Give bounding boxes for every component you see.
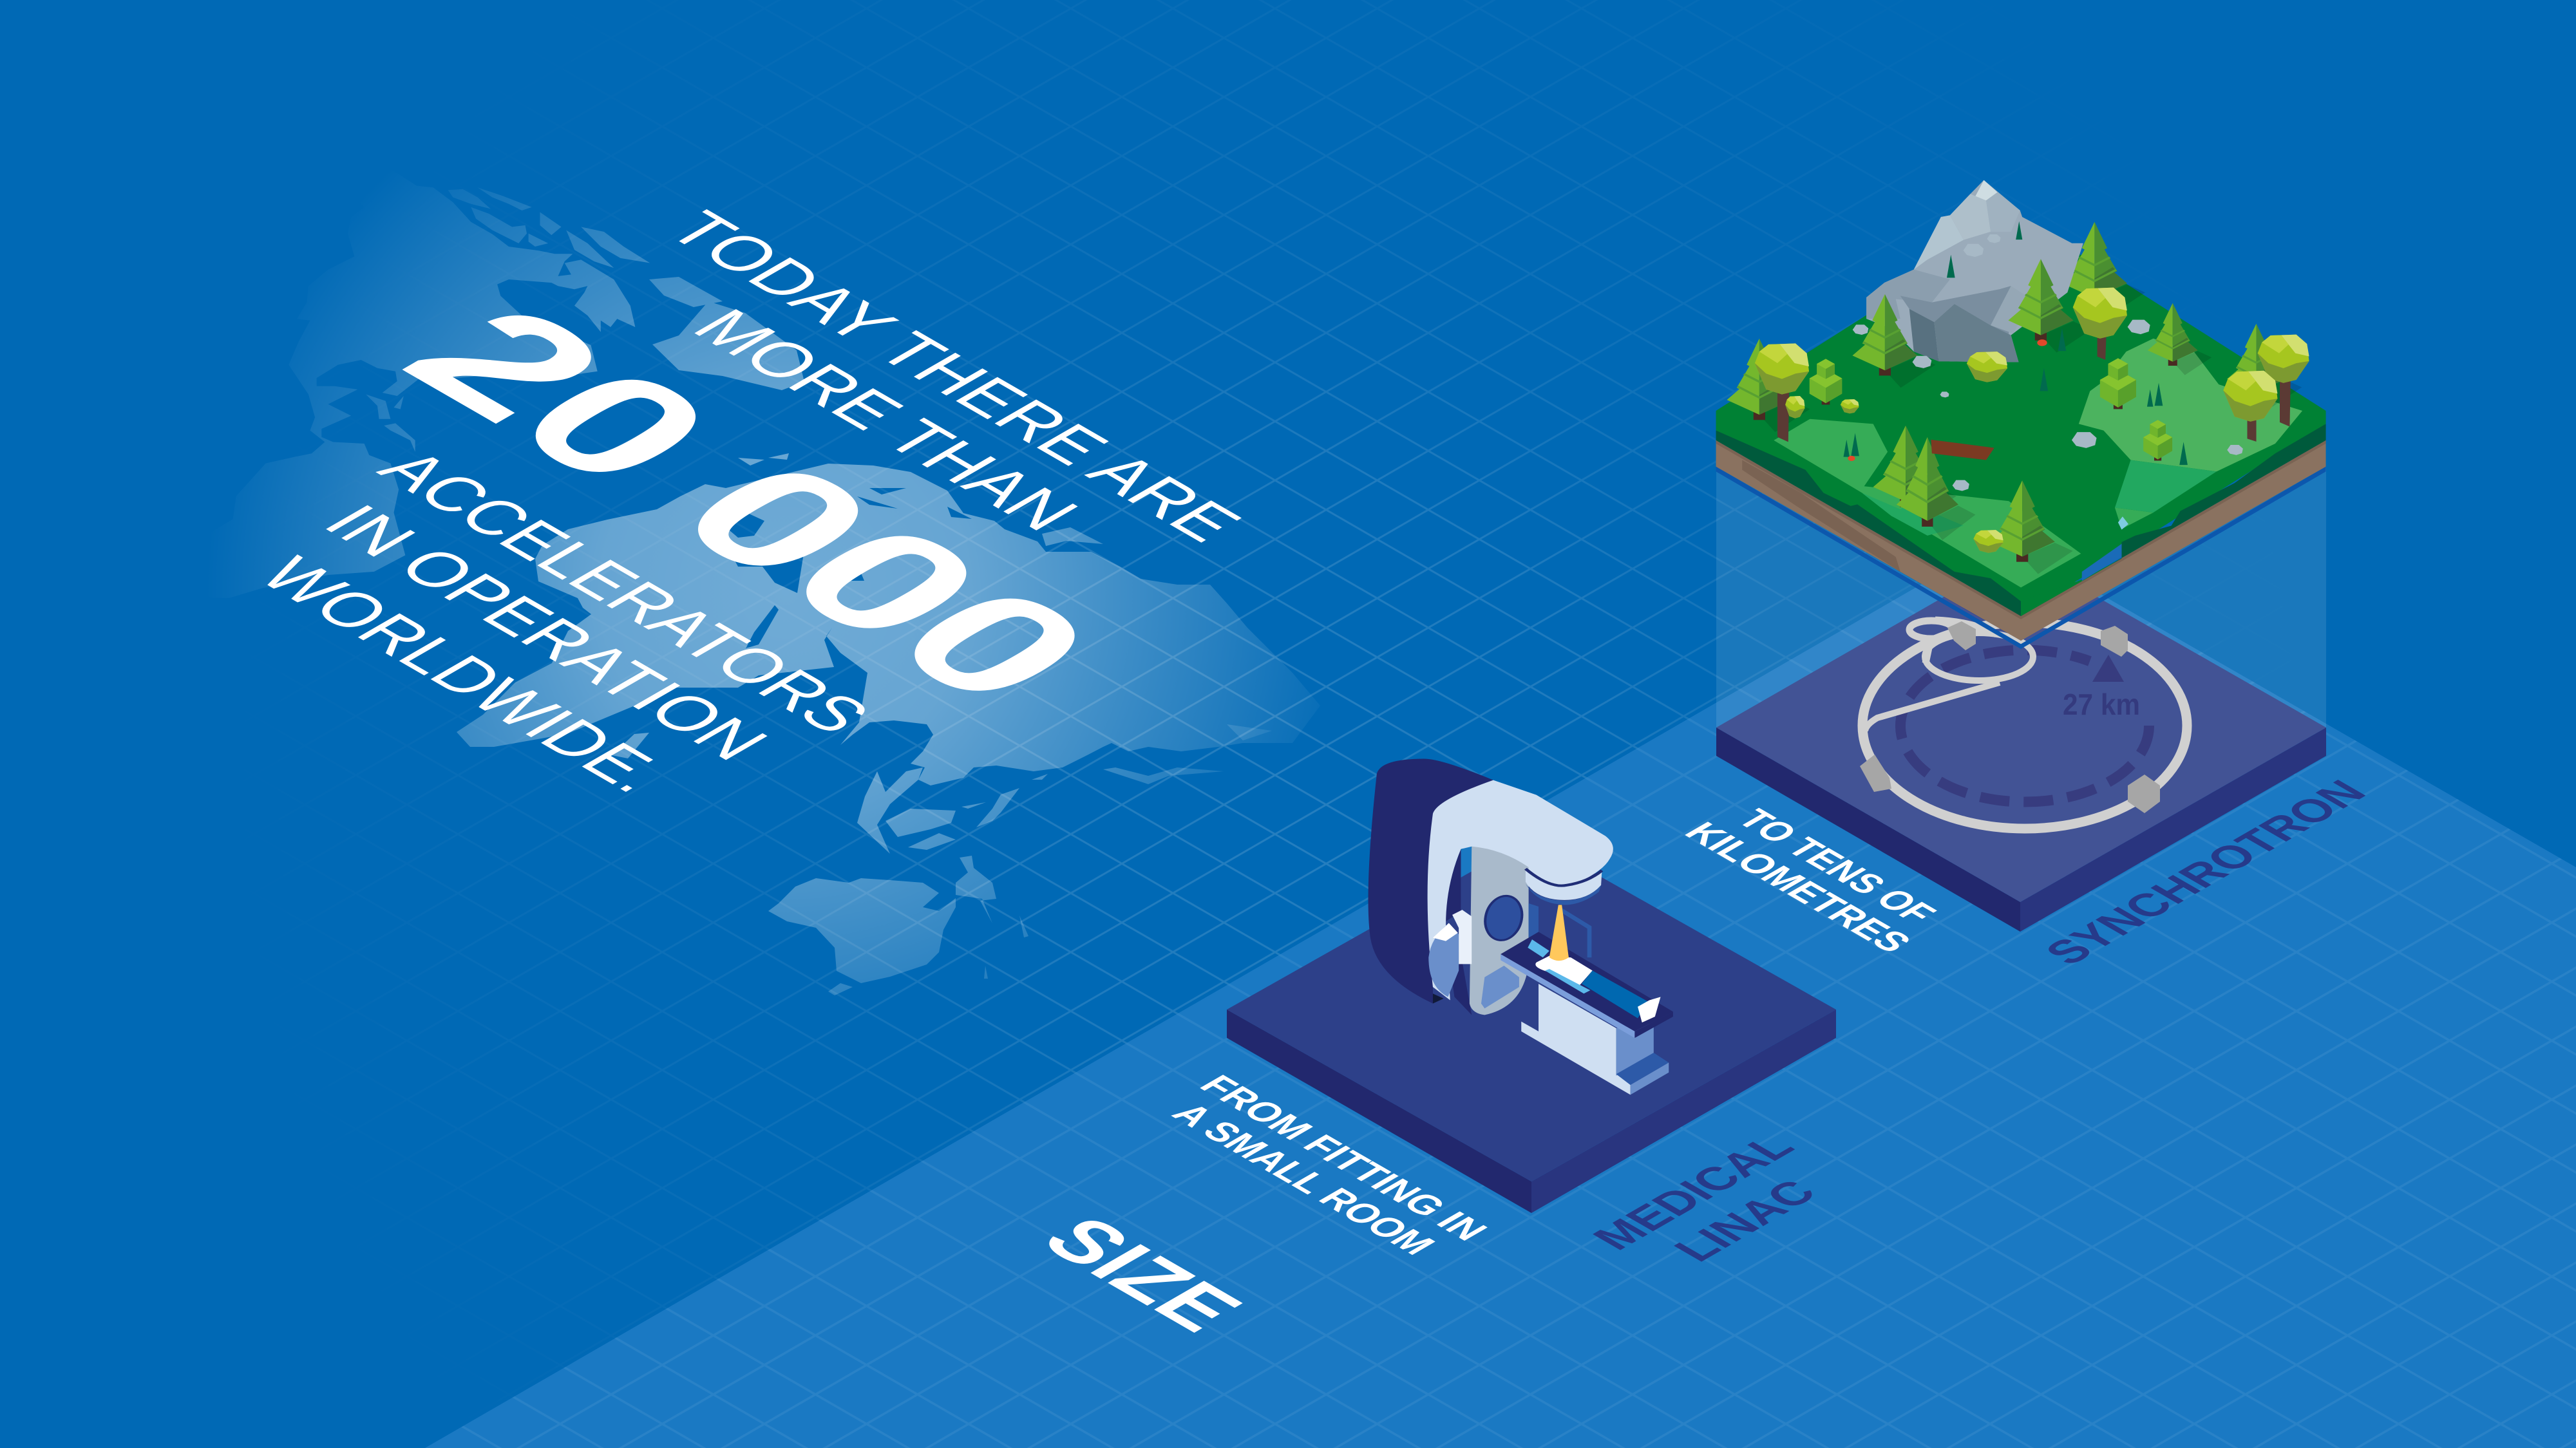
grid: upper plane (519, 3, 1918, 1280)
island soil (1716, 440, 2326, 641)
arm bracket (1452, 910, 1472, 964)
label: from fitting in a small room: A SMALL ROOM (1163, 1098, 1444, 1261)
text: more than: MORE THAN (677, 299, 1095, 541)
world map (200, 158, 1320, 995)
right grass front (2021, 559, 2121, 616)
teal patch, right (2115, 460, 2217, 512)
patient feet (1638, 997, 1661, 1022)
label: to tens of kilometres: TO TENS OF (1728, 804, 1946, 929)
dashed direction ring (1900, 650, 2149, 802)
base step top (1616, 1053, 1669, 1085)
small spikes (1844, 221, 2188, 465)
patient legs (1582, 971, 1649, 1019)
back pine (2062, 222, 2145, 315)
Americas mainland (200, 158, 635, 598)
bushes (1785, 352, 2007, 553)
cube trees (1810, 358, 2172, 461)
floor corner (1433, 993, 1444, 1004)
source loop (1909, 621, 1953, 639)
island shadow (1716, 467, 2326, 649)
patient arm (1545, 969, 1590, 993)
small patch (2115, 507, 2154, 529)
crystal (2118, 516, 2128, 530)
table base (1521, 984, 1631, 1095)
text: accelerators: ACCELERATORS (363, 440, 887, 744)
light grass patch, front (1774, 419, 2081, 587)
label: to tens of kilometres: KILOMETRES (1676, 816, 1921, 958)
head band (1526, 869, 1602, 886)
translucent column under island (1716, 467, 2326, 902)
map: Eurasia and Africa (457, 464, 1320, 785)
transfer line (1865, 682, 2000, 731)
right grass side (2021, 424, 2326, 616)
label: synchrotron: SYNCHROTRON (2034, 773, 2377, 972)
base side (1616, 1023, 1654, 1076)
ring length label: 27 km (2063, 688, 2140, 721)
label: medical linac: LINAC (1663, 1173, 1828, 1268)
map: Madagascar (612, 733, 649, 758)
water inlet (2082, 544, 2121, 581)
map: Iceland and islands (738, 453, 789, 465)
island landscape (1716, 180, 2326, 649)
patient torso (1535, 956, 1593, 986)
table edge (1501, 954, 1634, 1038)
table end (1634, 1011, 1673, 1038)
plate: medical linac (1227, 838, 1836, 1213)
radiation beam (1549, 905, 1569, 961)
text: worldwide: WORLDWIDE. (243, 547, 686, 802)
grey front panel (1470, 847, 1529, 1015)
lower inset (1481, 966, 1519, 1008)
map: Australia (768, 878, 1028, 995)
map: Japan and Kamchatka (1032, 724, 1272, 784)
round trees (1755, 288, 2309, 422)
treatment head (1526, 869, 1602, 900)
grass surface (1716, 217, 2326, 616)
gantry disc (1482, 894, 1526, 942)
label: medical linac: MEDICAL (1582, 1128, 1805, 1257)
head rim (1526, 883, 1601, 905)
gantry opening (1446, 849, 1472, 1015)
teal patch, left (1862, 493, 1964, 536)
base step side (1631, 1062, 1669, 1095)
map: Novaya Zemlya (1042, 527, 1103, 546)
mushrooms (1848, 339, 2047, 461)
lower bright plane (425, 538, 2576, 1448)
counterweight highlight (1433, 923, 1458, 941)
big number: 20 000 (360, 278, 1142, 730)
mountain (1866, 180, 2083, 362)
detector blocks (1860, 621, 2160, 813)
patient head (1528, 939, 1549, 957)
linac machine (1368, 758, 1673, 1095)
map: the Americas (200, 158, 650, 598)
counterweight (1428, 923, 1459, 997)
grid: lower plane (425, 538, 2576, 1448)
Arctic islands (448, 187, 650, 268)
trunks (1777, 335, 2291, 442)
Caribbean islands (366, 394, 415, 452)
fallen log (1931, 440, 1994, 460)
map: Greenland and Ellesmere (649, 277, 804, 390)
left grass side (1716, 431, 2021, 616)
imaging frame (1529, 903, 1591, 957)
arrowhead (2092, 655, 2124, 682)
plate: synchrotron (1716, 553, 2326, 932)
map: South-East Asia (857, 767, 1019, 923)
heading: size: SIZE (1023, 1205, 1263, 1344)
synchrotron ring diagram (1860, 620, 2187, 829)
loop connection (1926, 620, 1996, 663)
gantry arm (1428, 780, 1613, 1000)
injector ring (1925, 633, 2033, 681)
light grass patch, right (2079, 339, 2302, 471)
back panel (1368, 758, 1493, 1004)
table top (1501, 932, 1673, 1031)
soil strata (1716, 440, 2326, 619)
main ring (1862, 623, 2187, 829)
rocks (1853, 234, 2243, 491)
label: from fitting in a small room: FROM FITTING IN (1191, 1069, 1497, 1246)
text: today there are: TODAY THERE ARE (651, 201, 1258, 552)
headline: today there are more than 20 000 accelerators (243, 201, 1258, 802)
text: in operation: IN OPERATION (308, 494, 785, 770)
far pines and trees (1727, 259, 2302, 574)
